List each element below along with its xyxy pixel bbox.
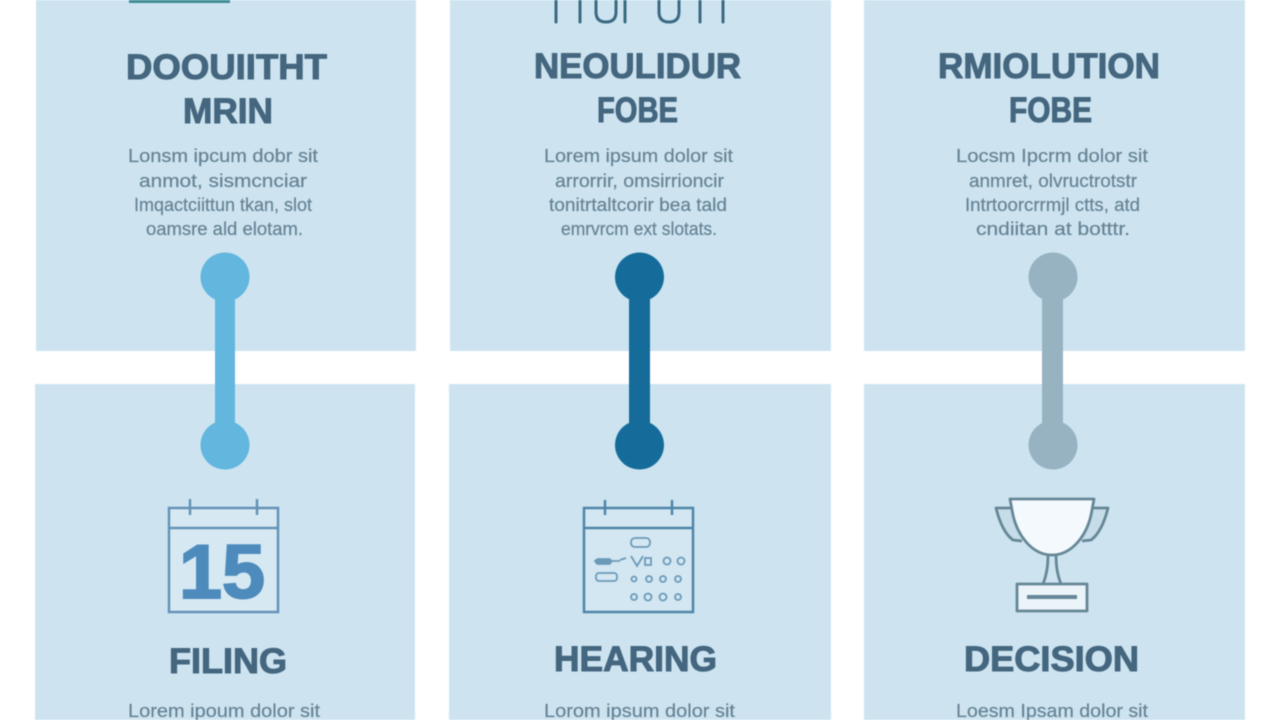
text block: dispute description — [128, 146, 318, 239]
panel: hearing — [449, 384, 831, 720]
text block: resolution description: Intrtoorcrrmjl ctts, atd — [965, 195, 1140, 215]
icon: cropped line glyph — [556, 0, 723, 22]
text block: dispute description: oamsre ald elotam. — [146, 219, 303, 239]
text block: dispute description: anmot, sismcnciar — [139, 171, 307, 191]
text block: negotiation description: tonitrtaltcorir bea tald — [549, 195, 727, 215]
heading: dispute: DOOUIITHT — [126, 48, 327, 87]
heading: negotiation: FOBE — [597, 91, 678, 130]
panel: resolution top — [864, 0, 1245, 351]
heading: resolution: RMIOLUTION — [938, 47, 1160, 86]
heading: negotiation: NEOULIDUR — [534, 47, 741, 86]
icon: trophy — [996, 499, 1108, 611]
icon: cropped teal base — [129, 0, 230, 3]
heading: decision: DECISION — [964, 640, 1139, 679]
heading: negotiation — [534, 47, 741, 130]
panel: filing — [35, 384, 415, 720]
heading: resolution: FOBE — [1009, 91, 1092, 130]
icon: calendar schedule — [584, 500, 693, 612]
connector: light blue — [200, 252, 250, 470]
text block: negotiation description: arrorrir, omsirrioncir — [555, 171, 724, 191]
text block: resolution description: cndiitan at botttr. — [976, 219, 1130, 239]
text block: resolution description — [956, 146, 1148, 239]
text block: negotiation description: emrvrcm ext slotats. — [561, 219, 717, 239]
heading: dispute — [126, 48, 327, 131]
text block: negotiation description — [544, 146, 733, 239]
icon: calendar 15 — [169, 499, 278, 615]
text block: negotiation description: Lorem ipsum dolor sit — [544, 146, 733, 166]
text block: dispute description: Imqactciittun tkan, slot — [134, 195, 312, 215]
icon: calendar 15: 15 — [179, 530, 265, 615]
text block: resolution description: anmret, olvructrotstr — [969, 171, 1137, 191]
heading: filing: FILING — [169, 642, 287, 681]
text block: dispute description: Lonsm ipcum dobr sit — [128, 146, 318, 166]
panel: dispute top — [36, 0, 416, 351]
text block: resolution description: Locsm Ipcrm dolor sit — [956, 146, 1148, 166]
connector: dark blue — [615, 252, 664, 470]
panel: negotiation top — [450, 0, 831, 351]
panel: decision — [864, 384, 1245, 720]
heading: dispute: MRIN — [183, 92, 273, 131]
heading: hearing: HEARING — [554, 640, 717, 679]
connector: grey blue — [1028, 252, 1078, 470]
heading: resolution — [938, 47, 1160, 130]
